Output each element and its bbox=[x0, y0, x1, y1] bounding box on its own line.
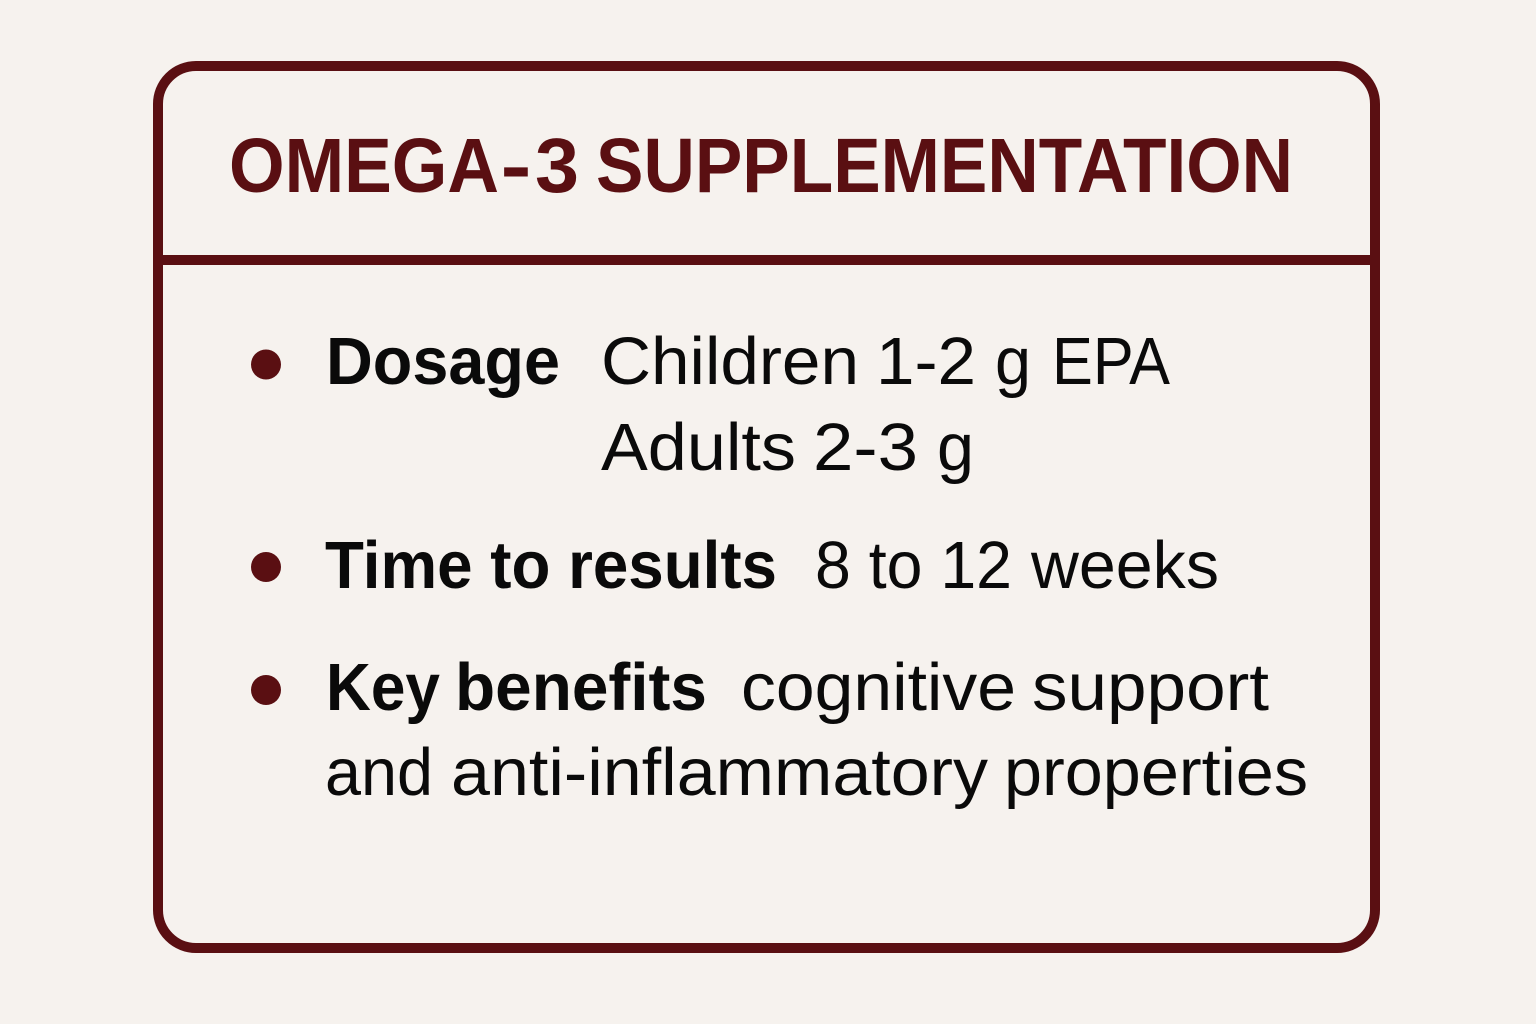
title bbox=[229, 123, 1293, 209]
text: adult dose bbox=[601, 410, 974, 485]
title: SUPPLEMENTATION bbox=[596, 123, 1293, 209]
text: weeks bbox=[815, 528, 1219, 603]
list item: dosage bbox=[251, 324, 1170, 485]
icon: bullet dosage bbox=[251, 350, 281, 380]
title: 3 bbox=[535, 123, 579, 209]
text: adult dose: g bbox=[937, 410, 974, 485]
label: key benefits: Key bbox=[326, 650, 440, 725]
text: adult dose: 2-3 bbox=[813, 410, 918, 485]
text: anti-inflammatory bbox=[325, 735, 1308, 810]
text: cognitive support: cognitive bbox=[741, 650, 1016, 725]
text: anti-inflammatory: properties bbox=[1004, 735, 1308, 810]
text: cognitive support: support bbox=[1032, 650, 1269, 725]
list item: key benefits bbox=[251, 650, 1308, 810]
title: OMEGA bbox=[229, 123, 499, 209]
panel: omega-3 card bbox=[158, 66, 1375, 948]
text: adult dose: Adults bbox=[601, 410, 796, 485]
text: children dose: Children bbox=[601, 324, 859, 399]
list item: time to results bbox=[251, 528, 1219, 603]
text: children dose: EPA bbox=[1052, 324, 1170, 399]
label: time to results: Time to results bbox=[325, 528, 777, 603]
text: cognitive support bbox=[741, 650, 1269, 725]
text: weeks: weeks bbox=[1030, 528, 1219, 603]
label: key benefits bbox=[326, 650, 707, 725]
text: anti-inflammatory: and bbox=[325, 735, 433, 810]
title: - bbox=[500, 123, 532, 209]
text: weeks: 8 to 12 bbox=[815, 528, 1012, 603]
text: children dose bbox=[601, 324, 1170, 399]
text: children dose: 1-2 bbox=[876, 324, 976, 399]
icon: bullet benefits bbox=[251, 675, 281, 705]
label: key benefits: benefits bbox=[455, 650, 707, 725]
label: dosage: Dosage bbox=[326, 324, 560, 399]
text: children dose: g bbox=[995, 324, 1031, 399]
icon: bullet time bbox=[251, 552, 281, 582]
text: anti-inflammatory: anti-inflammatory bbox=[451, 735, 989, 810]
